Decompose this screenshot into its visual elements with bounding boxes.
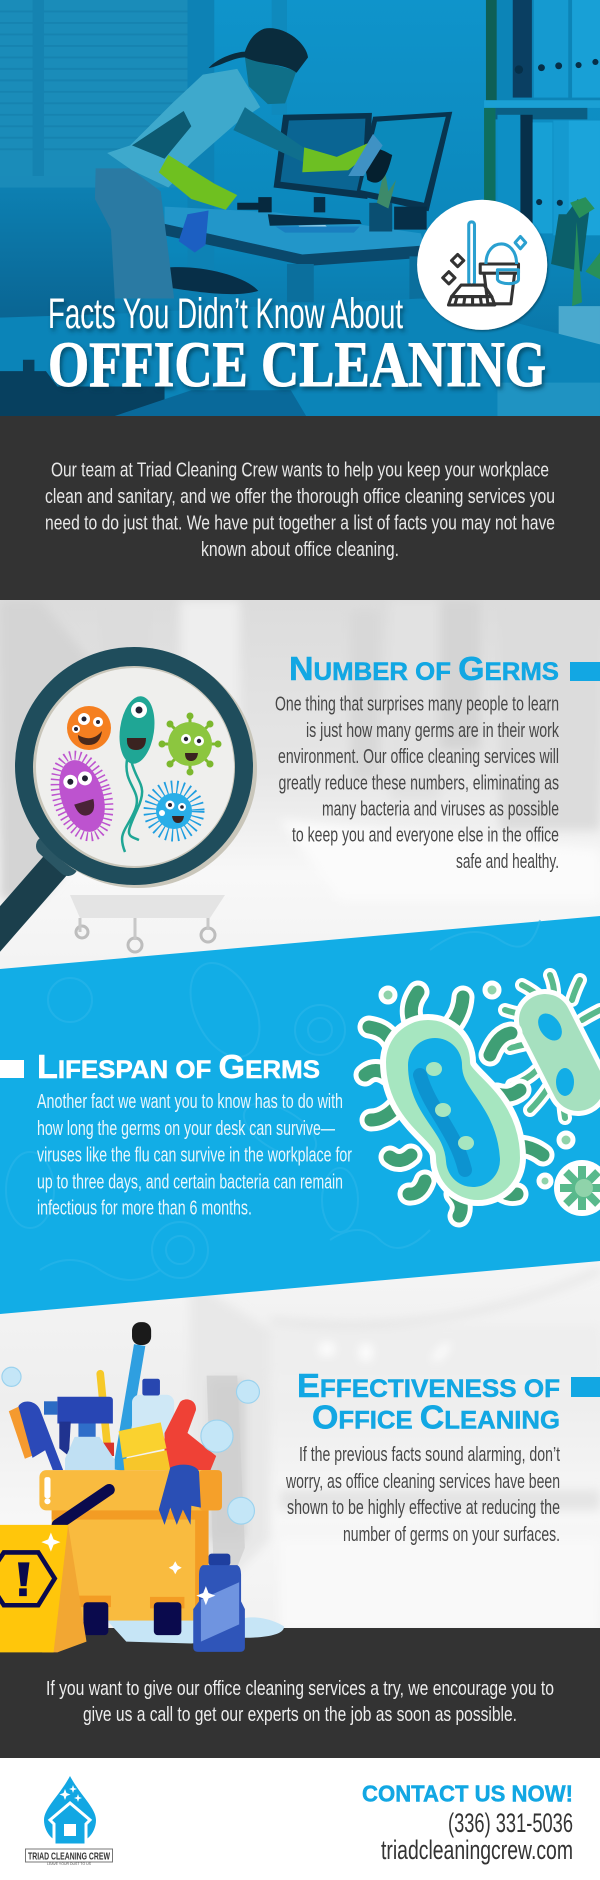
navy handle (57, 1490, 109, 1525)
panel: lifespan of germs blue band (0, 916, 600, 1314)
effectiveness text (285, 1443, 560, 1546)
rings (381, 983, 573, 1187)
contact details: CONTACT US NOW! (362, 1780, 573, 1806)
mop cart behind (207, 1376, 245, 1586)
panel: effectiveness background (0, 1255, 600, 1630)
red dustpan (165, 1399, 216, 1470)
background lower (0, 298, 600, 416)
mop pole (119, 1322, 151, 1470)
logo wordmark: TRIAD CLEANING CREW (28, 1850, 110, 1862)
lifespan text: infectious for more than 6 months. (37, 1196, 252, 1220)
back germ (505, 975, 600, 1118)
gloves (159, 155, 237, 210)
illustration: magnifying glass with germs (0, 647, 257, 945)
orange germ (67, 706, 111, 750)
back arm and shirt (107, 69, 260, 187)
spray bottle (44, 1397, 115, 1470)
lifespan text: how long the germs on your desk can survive— (37, 1117, 335, 1140)
intro text (45, 458, 555, 561)
effectiveness heading: EFFECTIVENESS OF (297, 1367, 560, 1404)
panel: footer (0, 1758, 600, 1880)
intro text: known about office cleaning. (201, 538, 399, 561)
hero photo: woman cleaning office monitor (0, 0, 600, 416)
sponge (119, 1422, 166, 1458)
logo wordmark (26, 1849, 112, 1866)
hero title: Facts You Didn’t Know About (48, 290, 403, 338)
wet floor sign (0, 1525, 182, 1652)
contact details (362, 1780, 573, 1865)
background germ pattern (6, 920, 540, 1280)
yellow stick (100, 1374, 107, 1445)
pants (95, 168, 174, 298)
brush (9, 1402, 63, 1470)
spikes (365, 992, 543, 1216)
lifespan text: viruses like the flu can survive in the workplace for (37, 1144, 352, 1166)
handle (0, 846, 68, 945)
purple germ (46, 749, 118, 843)
call to action text (46, 1677, 554, 1726)
head and hair (245, 57, 297, 104)
lifespan text: up to three days, and certain bacteria can remain (37, 1170, 343, 1194)
panel: call to action band (0, 1628, 600, 1758)
lifespan text: Another fact we want you to know has to do with (37, 1090, 343, 1113)
effectiveness heading: OFFICE CLEANING (312, 1398, 560, 1436)
panel: intro band (0, 416, 600, 600)
panel: number of germs (0, 600, 600, 980)
desk (165, 207, 425, 254)
heading: lifespan of germs: LIFESPAN OF GERMS (37, 1048, 320, 1085)
blue germ (150, 787, 198, 835)
monitors (274, 113, 372, 199)
shelf and binders (484, 0, 600, 348)
logo wordmark: LEAVE YOUR DUST TO US (47, 1862, 92, 1866)
heading: number of germs: NUMBER OF GERMS (289, 650, 559, 687)
dust (364, 149, 392, 183)
logo (26, 1776, 112, 1866)
effectiveness heading (297, 1367, 600, 1436)
puddle (107, 1617, 284, 1644)
spray bottle in hand (179, 210, 209, 253)
number of germs text (275, 692, 560, 873)
cleaning icon circle (417, 200, 547, 330)
chair (165, 267, 258, 294)
icon: water drop with house (44, 1776, 96, 1845)
floor cart (70, 895, 225, 952)
small flower germ (554, 1160, 600, 1216)
bubbles (2, 1367, 259, 1524)
lifespan text (37, 1090, 352, 1220)
body (428, 1062, 478, 1158)
spray bottle front (193, 1554, 245, 1652)
teal germ (115, 694, 159, 852)
hero title (48, 290, 546, 401)
bucket (39, 1470, 222, 1635)
detergent bottle (132, 1379, 174, 1437)
green germ (158, 712, 222, 776)
illustration: cleaning supplies bucket (0, 1322, 284, 1652)
illustration: large green bacteria (365, 975, 600, 1216)
glove (159, 1465, 201, 1525)
